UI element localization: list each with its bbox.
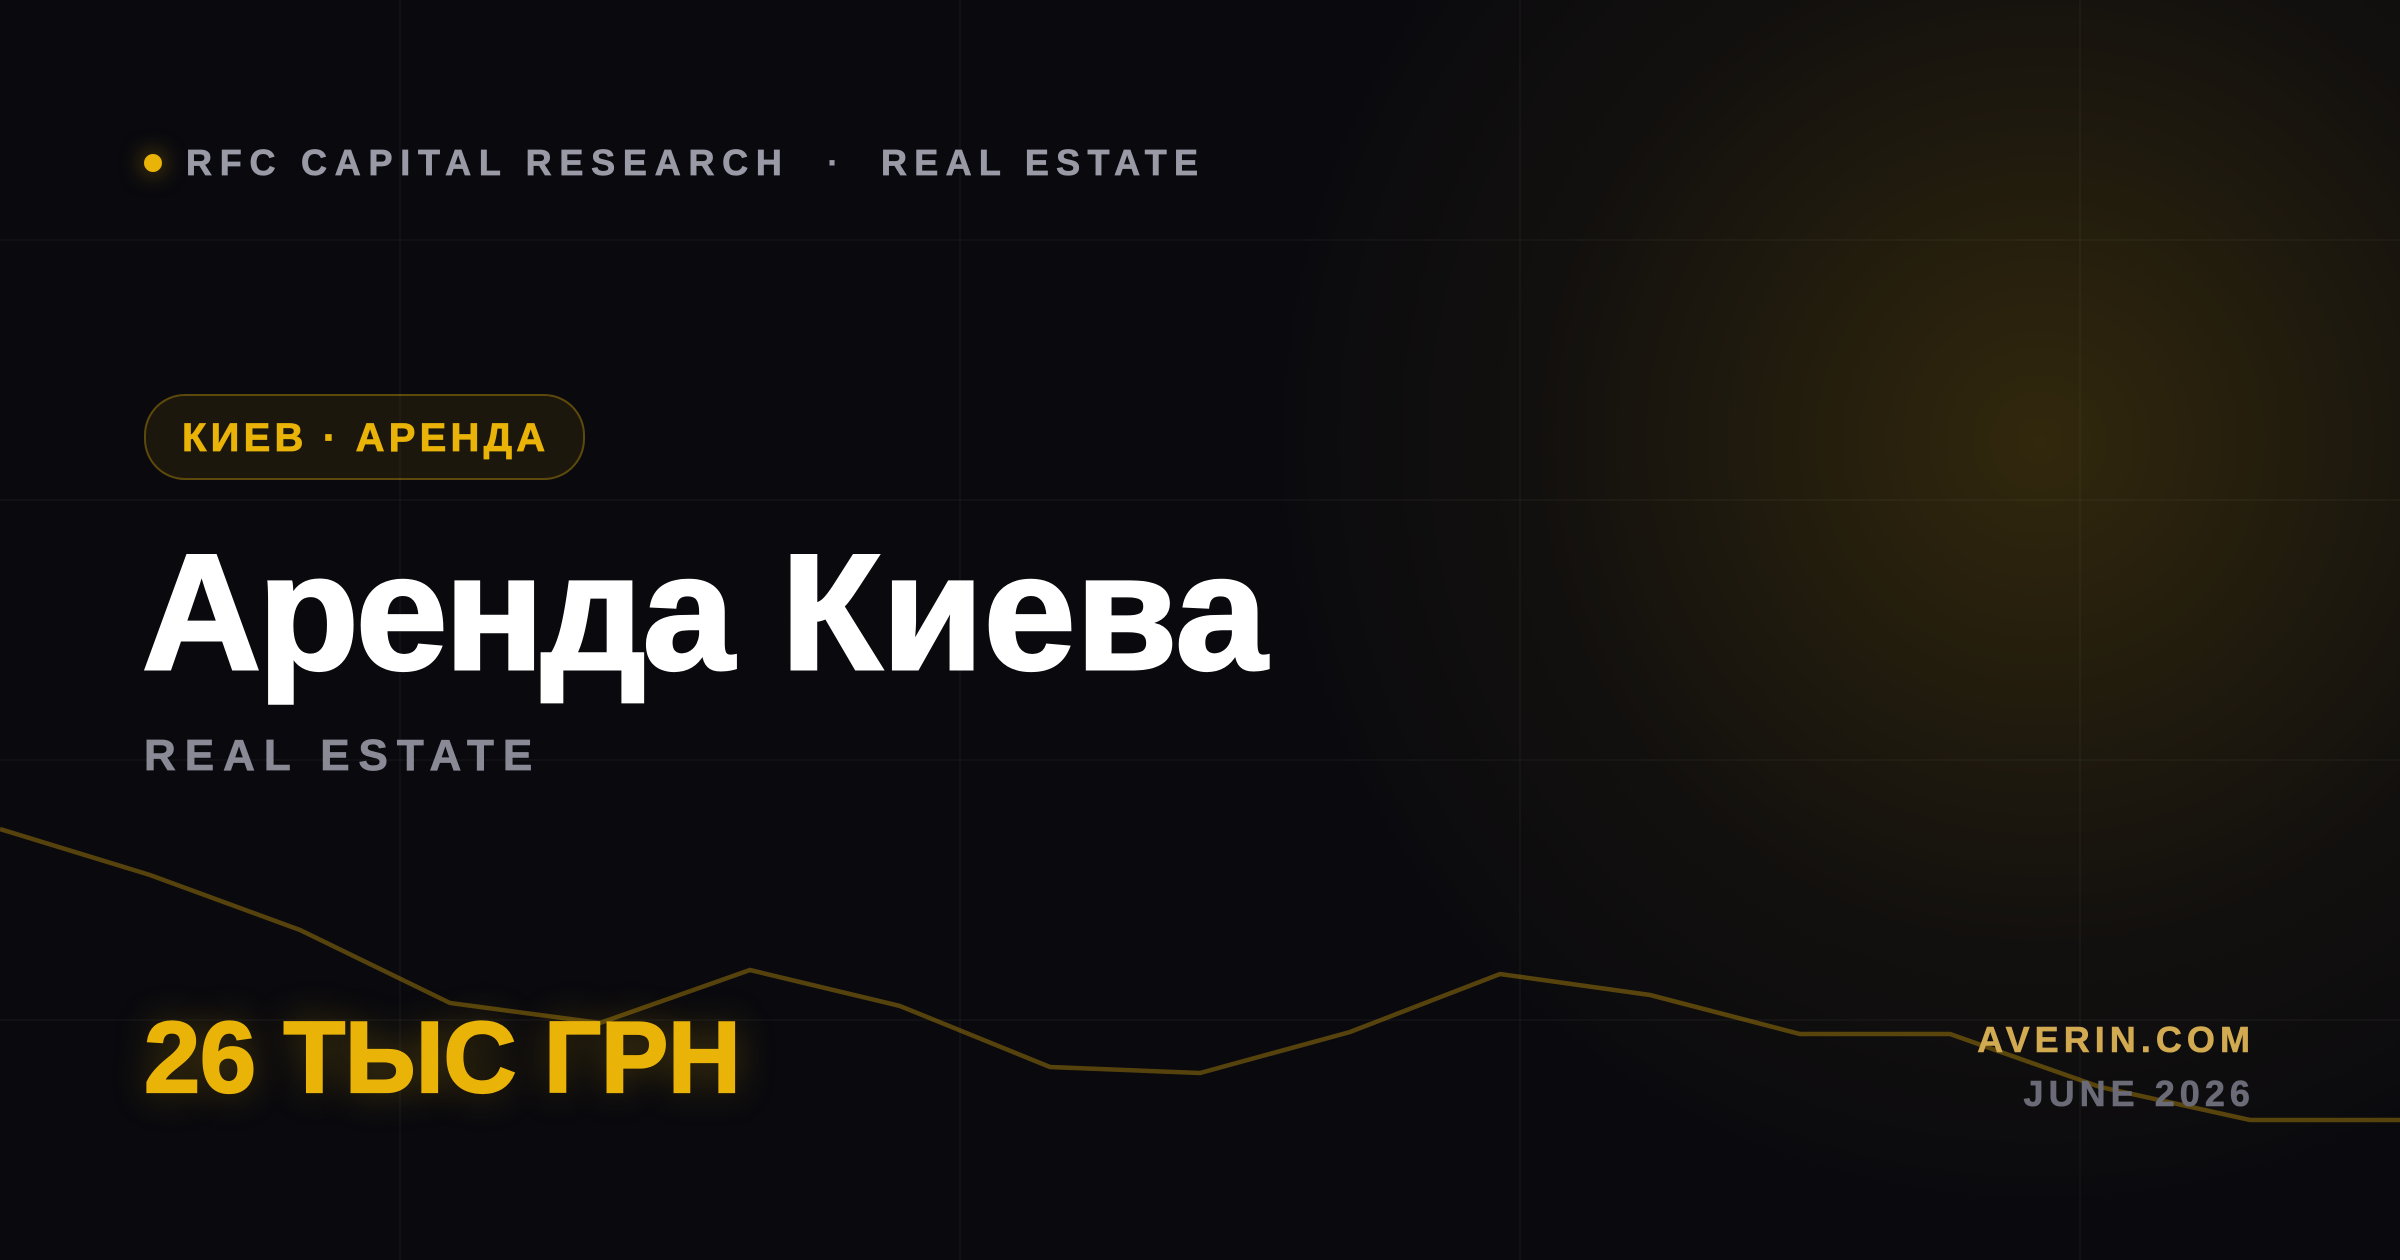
icon: status dot — [144, 154, 162, 172]
header label: category: REAL ESTATE — [881, 142, 1205, 183]
title: Аренда — [142, 520, 731, 704]
title: Киева — [781, 520, 1267, 704]
header label: source: RFC CAPITAL RESEARCH — [186, 142, 790, 183]
tag pill — [144, 394, 585, 480]
title — [142, 520, 1270, 705]
subtitle: REAL ESTATE — [144, 731, 541, 780]
tag pill text: КИЕВ · АРЕНДА — [182, 416, 549, 460]
date: JUNE 2026 — [2024, 1073, 2255, 1114]
header separator: · — [827, 142, 839, 183]
key value: 26 ТЫС ГРН — [144, 1002, 741, 1114]
header row — [132, 142, 1205, 184]
trend line chart — [0, 829, 2400, 1120]
website: AVERIN.COM — [1977, 1019, 2255, 1060]
